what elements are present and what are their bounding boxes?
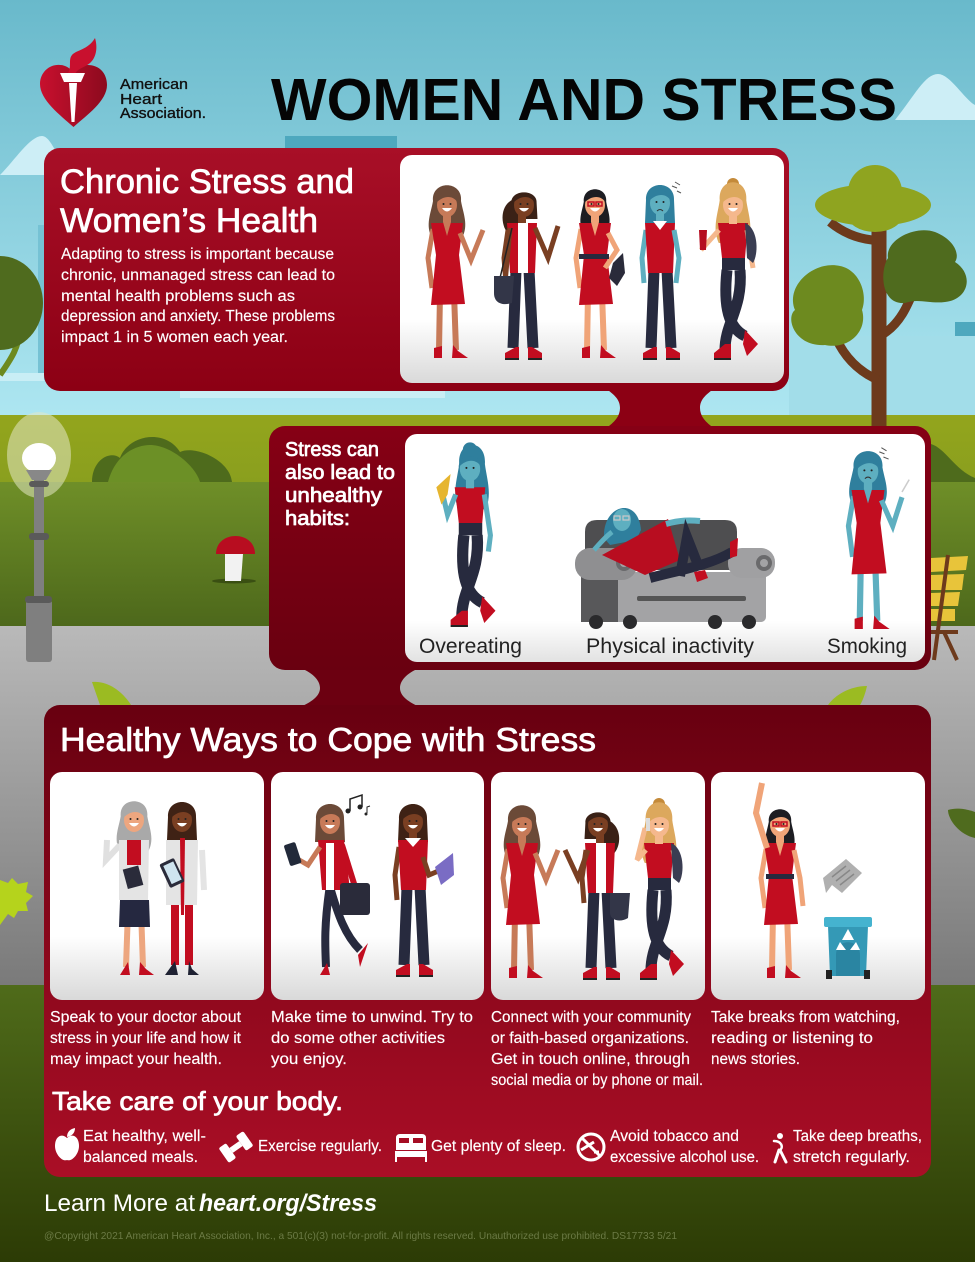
- item: avoid tobacco: [610, 1128, 759, 1166]
- heading: chronic stress: Women’s Health: [60, 202, 318, 240]
- icon: dumbbell: [219, 1131, 253, 1163]
- heading: stress can lead to habits: Stress can: [285, 438, 379, 461]
- item: healthy meals: Eat healthy, well-: [83, 1128, 206, 1145]
- text: take breaks: reading or listening to: [711, 1030, 873, 1047]
- card: doctors: [50, 772, 264, 1000]
- call to action: learn more: [44, 1190, 377, 1217]
- text: speak to your doctor: Speak to your doctor about: [50, 1009, 242, 1026]
- body text: chronic stress: impact 1 in 5 women each year.: [61, 329, 288, 346]
- text: make time to unwind: Make time to unwind. Try to: [271, 1009, 473, 1026]
- text: connect with community: social media or by phone or mail.: [491, 1072, 703, 1089]
- title: WOMEN AND STRESS: [271, 67, 897, 133]
- figure: overeating: [436, 442, 496, 627]
- woman in red dress with handbag: [576, 189, 625, 358]
- lamp post: [7, 412, 71, 662]
- item: deep breaths: Take deep breaths,: [793, 1128, 922, 1145]
- item: healthy meals: balanced meals.: [83, 1149, 198, 1166]
- copyright: @Copyright 2021 American Heart Association, Inc., a 501(c)(3) not-for-profit. All rights reserved. Unauthorized use prohibited. DS17733 5/21: [44, 1230, 677, 1242]
- connector: panel two to panel three: [298, 667, 422, 708]
- logo wordmark: Association.: [120, 105, 206, 122]
- panel: healthy ways to cope: [44, 705, 931, 1177]
- label: physical inactivity: Physical inactivity: [586, 635, 755, 658]
- background: buildings: [285, 136, 975, 336]
- woman tossing newspaper: [756, 783, 803, 978]
- heading: healthy ways: Healthy Ways to Cope with Stress: [60, 722, 596, 759]
- item: deep breaths: [793, 1128, 922, 1166]
- bushes: [92, 437, 232, 482]
- heading: stress can lead to habits: also lead to: [285, 461, 395, 484]
- item: avoid tobacco: Avoid tobacco and: [610, 1128, 739, 1145]
- card: community: [491, 772, 705, 1000]
- card: unwind: [271, 772, 484, 1000]
- text: take breaks: news stories.: [711, 1051, 800, 1068]
- woman in jacket waving back: [565, 812, 630, 980]
- item: healthy meals: [83, 1128, 206, 1166]
- call to action: learn more: Learn More at: [44, 1190, 195, 1217]
- panel: chronic stress: [44, 148, 789, 391]
- body text: chronic stress: mental health problems such as: [61, 288, 295, 305]
- icon: apple: [55, 1128, 79, 1160]
- item: avoid tobacco: excessive alcohol use.: [610, 1149, 759, 1166]
- woman reading a book: [395, 804, 454, 977]
- icon: bed: [395, 1134, 427, 1162]
- body text: chronic stress: [61, 246, 335, 346]
- background: left tree: [0, 256, 43, 375]
- icon: music notes: [346, 795, 370, 816]
- label: overeating: Overeating: [419, 635, 522, 658]
- body text: chronic stress: depression and anxiety. These problems: [61, 308, 335, 325]
- illustration card: habits: [405, 434, 925, 662]
- figure: couch and physical inactivity: [575, 508, 775, 629]
- body text: chronic stress: Adapting to stress is important because: [61, 246, 334, 263]
- illustration card: five women: [400, 155, 784, 383]
- heading: chronic stress: Chronic Stress and: [60, 163, 354, 201]
- heading: stress can lead to habits: unhealthy: [285, 484, 383, 507]
- text: speak to your doctor: stress in your life and how it: [50, 1030, 242, 1047]
- woman in red dress waving: [428, 185, 483, 358]
- figure: smoking: [848, 448, 909, 629]
- logo: American Heart Association: [40, 38, 206, 127]
- background: sky: [0, 0, 975, 415]
- blonde woman with coffee: [699, 178, 758, 360]
- text: connect with community: or faith-based organizations.: [491, 1030, 689, 1047]
- text: connect with community: [491, 1009, 703, 1089]
- woman in red jacket with bag: [494, 192, 558, 360]
- icon: recycling bin: [824, 917, 872, 979]
- text: connect with community: Get in touch online, through: [491, 1051, 690, 1068]
- card: take breaks from news: [711, 772, 925, 1000]
- leaves: [0, 682, 975, 925]
- heading: take care of your body: Take care of your body.: [52, 1086, 343, 1116]
- text: speak to your doctor: [50, 1009, 242, 1068]
- text: make time to unwind: you enjoy.: [271, 1051, 347, 1068]
- younger doctor: [159, 802, 204, 975]
- text: take breaks: [711, 1009, 900, 1068]
- stressed woman, blue skin: [642, 182, 681, 360]
- heading: stress can lead to habits: [285, 438, 395, 530]
- bench: [931, 555, 968, 660]
- background: grass and hills: [0, 415, 975, 1262]
- body text: chronic stress: chronic, unmanaged stress can lead to: [61, 267, 335, 284]
- logo wordmark: [120, 76, 206, 122]
- woman walking with music: [284, 804, 370, 975]
- text: connect with community: Connect with your community: [491, 1009, 691, 1026]
- item: sleep: Get plenty of sleep.: [431, 1138, 566, 1155]
- text: take breaks: Take breaks from watching,: [711, 1009, 900, 1026]
- blonde woman on phone: [637, 798, 684, 980]
- text: speak to your doctor: may impact your health.: [50, 1051, 222, 1068]
- heading: chronic stress: [60, 163, 354, 240]
- woman in dress waving: [503, 805, 558, 978]
- panel: unhealthy habits: [269, 426, 931, 670]
- item: exercise: Exercise regularly.: [258, 1138, 382, 1155]
- icon: newspaper: [823, 859, 862, 893]
- item: deep breaths: stretch regularly.: [793, 1149, 910, 1166]
- icon: no tobacco: [578, 1134, 604, 1160]
- label: smoking: Smoking: [827, 635, 907, 658]
- connector: panel one to panel two: [605, 388, 715, 429]
- background: clouds: [0, 74, 975, 175]
- logo wordmark: Heart: [120, 91, 163, 108]
- background: right tree: [791, 165, 967, 428]
- senior doctor: [106, 801, 154, 975]
- text: make time to unwind: [271, 1009, 473, 1068]
- icon: stretching figure: [774, 1133, 786, 1162]
- logo wordmark: American: [120, 76, 188, 93]
- heading: stress can lead to habits: habits:: [285, 507, 350, 530]
- call to action: learn more: heart.org/Stress: [199, 1190, 377, 1217]
- icon: heart and torch: [40, 38, 107, 127]
- text: make time to unwind: do some other activities: [271, 1030, 445, 1047]
- mushroom: [212, 536, 256, 584]
